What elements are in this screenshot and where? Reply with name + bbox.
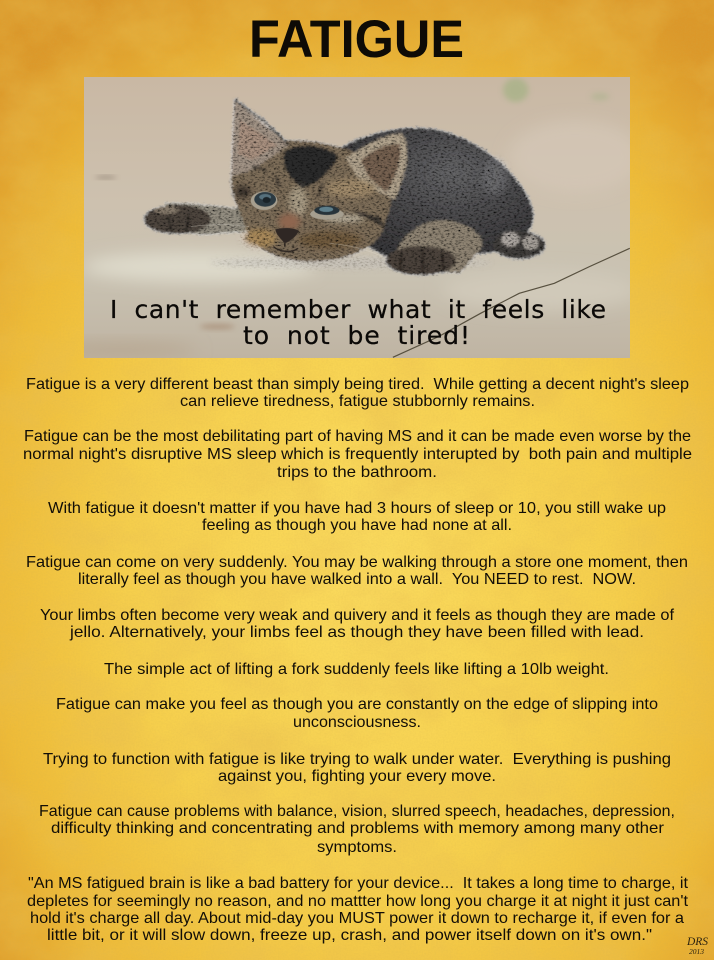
signature: 2013 — [689, 948, 705, 956]
kitten face — [191, 191, 382, 257]
paragraph 10: quote: little bit, or it will slow down, freeze up, crash, and power itself down on it's own." — [47, 927, 652, 944]
paragraph 10: quote: "An MS fatigued brain is like a bad battery for your device... It takes a long time to charge, it — [28, 875, 689, 892]
title: FATIGUE — [249, 10, 464, 69]
paragraph 9: difficulty thinking and concentrating and problems with memory among many other — [51, 820, 664, 837]
front leg — [386, 220, 482, 275]
cheek and brow shading — [235, 167, 386, 249]
paragraph 10: quote: hold it's charge all day. About mid-day you MUST power it down to recharge it, if even for a — [30, 910, 684, 927]
photo ground light patches — [42, 78, 642, 357]
paragraph 7 — [56, 696, 658, 731]
paragraph 9: Fatigue can cause problems with balance, vision, slurred speech, headaches, depression, — [39, 803, 675, 820]
paragraph 2: trips to the bathroom. — [277, 464, 437, 481]
paragraph 6: The simple act of lifting a fork suddenly feels like lifting a 10lb weight. — [104, 661, 609, 678]
forehead marking — [283, 146, 338, 188]
photo caption — [110, 295, 606, 350]
left eye — [251, 191, 277, 210]
photo caption: to not be tired! — [243, 321, 470, 350]
right ear — [345, 133, 407, 200]
paragraph 3 — [48, 500, 666, 534]
paragraph 8 — [43, 751, 671, 785]
paragraph 3: With fatigue it doesn't matter if you have had 3 hours of sleep or 10, you still wake up — [48, 500, 666, 517]
paragraph 1: Fatigue is a very different beast than simply being tired. While getting a decent night's sleep — [26, 376, 689, 393]
paragraph 2: normal night's disruptive MS sleep which is frequently interupted by both pain and multiple — [23, 446, 692, 463]
paragraph 5: Your limbs often become very weak and quivery and it feels as though they are made of — [40, 607, 675, 624]
kitten body — [330, 128, 534, 257]
paragraph 1 — [26, 376, 689, 410]
paragraph 7: Fatigue can make you feel as though you are constantly on the edge of slipping into — [56, 696, 658, 713]
body text — [23, 376, 692, 944]
paragraph 3: feeling as though you have had none at all. — [202, 517, 512, 534]
paragraph 7: unconsciousness. — [293, 714, 421, 731]
paragraph 8: against you, fighting your every move. — [218, 768, 496, 785]
paragraph 2 — [23, 428, 692, 481]
paragraph 2: Fatigue can be the most debilitating part of having MS and it can be made even worse by the — [24, 428, 691, 445]
paragraph 8: Trying to function with fatigue is like trying to walk under water. Everything is pushing — [43, 751, 671, 768]
paragraph 10: quote — [27, 875, 689, 944]
left ear — [231, 99, 289, 177]
paragraph 1: can relieve tiredness, fatigue stubbornly remains. — [180, 393, 535, 410]
paragraph 4 — [26, 554, 688, 588]
photo: tired kitten with caption — [42, 77, 642, 358]
photo caption: I can't remember what it feels like — [110, 295, 606, 324]
kitten — [144, 99, 546, 275]
paragraph 5: jello. Alternatively, your limbs feel as though they have been filled with lead. — [69, 624, 644, 641]
paragraph 9: symptoms. — [317, 839, 397, 856]
kitten shadow — [210, 257, 491, 268]
signature — [686, 934, 708, 956]
head — [231, 140, 391, 262]
whiskers — [191, 225, 382, 257]
left arm — [144, 203, 247, 235]
signature: DRS — [686, 934, 708, 948]
right eye — [310, 206, 344, 220]
rear paw — [493, 231, 546, 259]
paragraph 4: literally feel as though you have walked into a wall. You NEED to rest. NOW. — [78, 571, 636, 588]
paragraph 5 — [40, 607, 675, 641]
paragraph 4: Fatigue can come on very suddenly. You may be walking through a store one moment, then — [26, 554, 688, 571]
paragraph 10: quote: depletes for seemingly no reason, and no mattter how long you charge it at night it just can't — [27, 893, 689, 910]
paragraph 9 — [39, 803, 675, 856]
nose — [274, 214, 300, 251]
